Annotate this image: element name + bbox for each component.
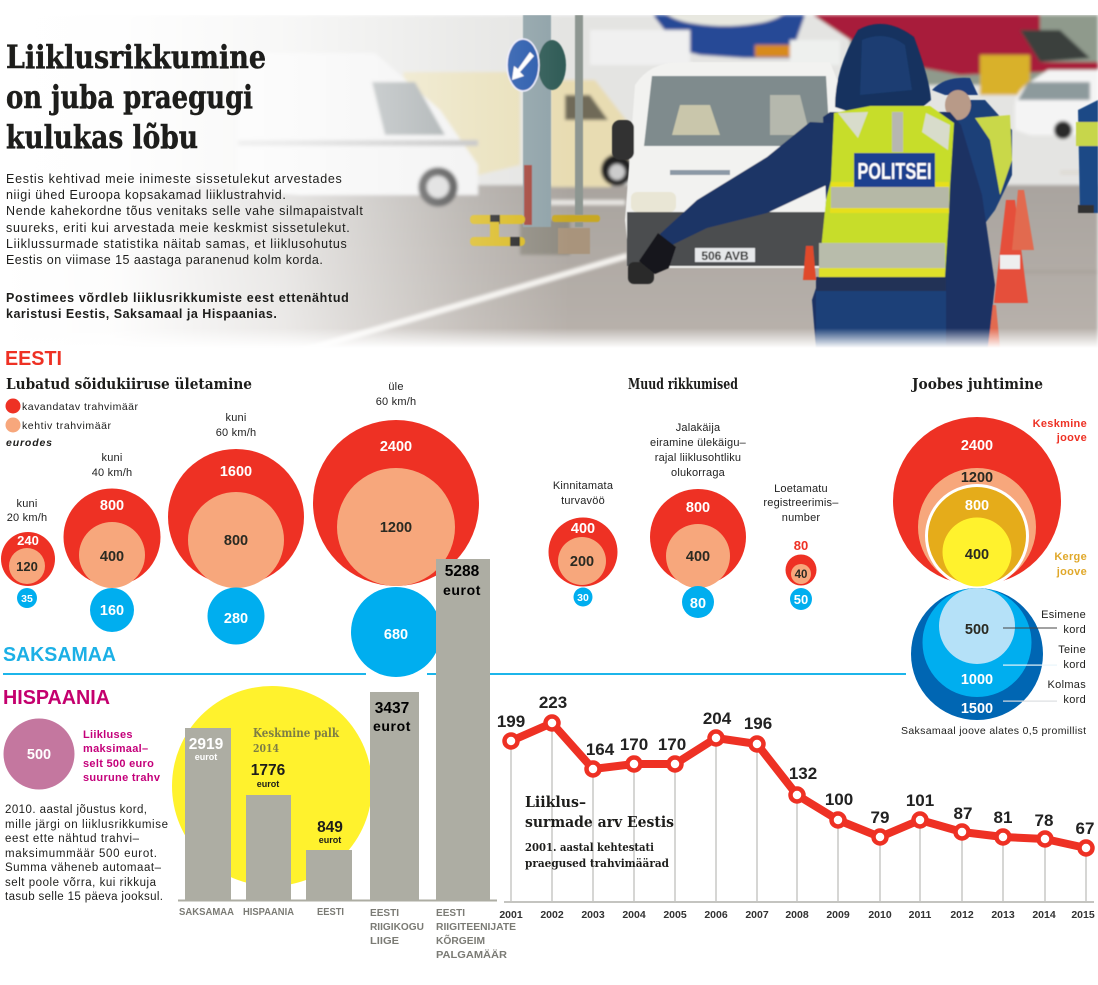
intro text: niigi ühed Euroopa kopsakamad liiklustrahvid.: [6, 188, 286, 202]
salary chart: eurot: [195, 752, 217, 762]
bubble group: pedestrian: rajal liiklusohtliku: [655, 452, 741, 464]
Hispaania callout: suurune trahv: [83, 772, 161, 784]
cones: [994, 200, 1028, 303]
bubble group: up to 20 km/h: 120: [16, 559, 38, 574]
bubble group: drunk driving Germany: Esimene: [1041, 609, 1086, 621]
bubble group: drunk driving Germany: 500: [965, 622, 989, 638]
title: on juba praegugi: [6, 78, 253, 116]
line chart: traffic deaths: 223: [539, 693, 567, 712]
salary chart: EESTI: [317, 906, 344, 918]
salary chart: 5288: [445, 563, 480, 580]
line chart: traffic deaths: 2010: [868, 909, 892, 921]
heading: other violations: Muud rikkumised: [628, 375, 738, 393]
bubble group: unreadable plate: registreerimis–: [763, 497, 839, 509]
line chart: traffic deaths: [497, 693, 1095, 921]
salary chart: eurot: [319, 835, 341, 845]
intro text: [6, 172, 363, 267]
salary chart: eurot: [257, 779, 279, 789]
Saksamaa heading: SAKSAMAA: [3, 644, 116, 666]
bubble group: drunk driving Estonia: 1200: [961, 470, 993, 486]
bubble group: over 60 km/h: 60 km/h: [376, 396, 416, 408]
line chart: traffic deaths: 196: [744, 714, 772, 733]
Hispaania text: [5, 804, 168, 903]
bubble group: over 60 km/h: 680: [384, 627, 408, 643]
bubble group: up to 60 km/h: [168, 412, 304, 644]
line chart title: Liiklus–: [525, 793, 586, 811]
line chart: traffic deaths: 2009: [826, 909, 850, 921]
bubble group: up to 20 km/h: 35: [21, 593, 33, 605]
bubble group: up to 40 km/h: kuni: [102, 452, 122, 464]
salary chart: 2014: [253, 741, 279, 755]
bubble group: drunk driving Germany: Saksamaal joove alates 0,5 promillist: [901, 725, 1086, 737]
photo: police officer stopping a van: [151, 15, 1098, 347]
white van: [625, 62, 845, 268]
bubble group: seat belt: 30: [577, 592, 589, 604]
line chart: traffic deaths: 170: [620, 735, 648, 754]
salary chart: 3437: [375, 700, 409, 717]
bubble group: unreadable plate: number: [782, 512, 820, 524]
line chart title: [525, 793, 674, 870]
bubble group: pedestrian: 400: [686, 549, 710, 565]
intro text bold: Postimees võrdleb liiklusrikkumiste eest ettenähtud: [6, 291, 349, 305]
line chart: traffic deaths: 2001: [499, 909, 523, 921]
salary chart: SAKSAMAA: [179, 906, 234, 918]
salary chart: LIIGE: [370, 935, 399, 947]
bubble group: up to 60 km/h: 800: [224, 533, 248, 549]
line chart: traffic deaths: 79: [871, 808, 889, 827]
intro text bold: [6, 291, 349, 321]
bubble group: pedestrian: Jalakäija: [676, 422, 721, 434]
bubble group: over 60 km/h: [313, 381, 479, 677]
bubble group: drunk driving Estonia: joove: [1056, 566, 1087, 578]
salary chart: EESTI: [370, 907, 399, 919]
Hispaania callout: selt 500 euro: [83, 758, 154, 770]
line chart: traffic deaths: 2008: [785, 909, 809, 921]
title: Liiklusrikkumine: [6, 38, 266, 76]
intro text: suureks, eriti kui arvestada meie keskmist sissetulekut.: [6, 221, 350, 235]
bubble group: drunk driving Germany: kord: [1063, 624, 1086, 636]
bubble group: pedestrian: 80: [690, 596, 706, 612]
bubble group: up to 60 km/h: 60 km/h: [216, 427, 256, 439]
line chart: traffic deaths: 87: [954, 804, 972, 823]
Hispaania callout: [83, 729, 161, 784]
bubble group: drunk driving Estonia: 800: [965, 498, 989, 514]
salary chart: 2919: [189, 736, 224, 753]
bubble group: over 60 km/h: üle: [388, 381, 404, 393]
bubble group: unreadable plate: Loetamatu: [774, 483, 828, 495]
line chart: traffic deaths: 2003: [581, 909, 605, 921]
bubble group: drunk driving Germany: Teine: [1058, 644, 1086, 656]
Hispaania fine bubble: 500: [27, 747, 51, 763]
salary chart: PALGAMÄÄR: [436, 948, 507, 961]
Hispaania text: selt poole võrra, kui rikkuja: [5, 877, 157, 889]
line chart: traffic deaths: 2004: [622, 909, 646, 921]
Hispaania text: eest ette nähtud trahvi–: [5, 833, 140, 845]
Hispaania text: maksimummäär 500 eurot.: [5, 848, 157, 860]
line chart title: praegused trahvimäärad: [525, 856, 669, 870]
line chart: traffic deaths: 81: [994, 808, 1012, 827]
Hispaania heading: HISPAANIA: [3, 687, 110, 709]
bubble group: drunk driving Estonia: joove: [1056, 432, 1087, 444]
salary chart: Keskmine palk: [253, 726, 340, 740]
salary chart: [172, 559, 516, 961]
bubble group: seat belt: Kinnitamata: [553, 480, 614, 492]
intro text: Liiklussurmade statistika näitab samas, et liiklusohutus: [6, 237, 347, 251]
salary chart: EESTI: [436, 907, 465, 919]
line chart: traffic deaths: 2007: [745, 909, 769, 921]
bubble group: pedestrian: eiramine ülekäigu–: [650, 437, 747, 449]
legend: [6, 398, 138, 449]
line chart: traffic deaths: 2013: [991, 909, 1015, 921]
bubble group: unreadable plate: 50: [794, 592, 808, 607]
intro text bold: karistusi Eestis, Saksamaal ja Hispaanias.: [6, 307, 277, 321]
bubble group: seat belt: 400: [571, 521, 595, 537]
Hispaania text: tasub selle 15 päeva jooksul.: [5, 891, 163, 903]
bubble group: drunk driving Estonia: Kerge: [1054, 551, 1087, 563]
bubble group: drunk driving Germany: kord: [1063, 694, 1086, 706]
line chart title: surmade arv Eestis: [525, 813, 674, 831]
intro text: Nende kahekordne tõus venitaks selle vahe silmapaistvalt: [6, 204, 363, 218]
line chart: traffic deaths: 170: [658, 735, 686, 754]
Hispaania callout: Liikluses: [83, 729, 133, 741]
bubble group: pedestrian: olukorraga: [671, 467, 726, 479]
officer: [812, 112, 995, 348]
bubble group: up to 20 km/h: kuni: [17, 498, 37, 510]
line chart: traffic deaths: 2006: [704, 909, 728, 921]
photo: police officer stopping a van: POLITSEI: [858, 158, 932, 184]
salary chart: eurot: [443, 582, 481, 598]
bubble group: up to 40 km/h: 400: [100, 549, 124, 565]
heading: EESTI: EESTI: [5, 348, 62, 370]
line chart: traffic deaths: 132: [789, 764, 817, 783]
line chart title: 2001. aastal kehtestati: [525, 840, 655, 854]
bubble group: drunk driving Estonia: [893, 417, 1087, 588]
bubble group: unreadable plate: 80: [794, 538, 808, 553]
bubble group: drunk driving Germany: [901, 588, 1086, 737]
bubble group: up to 60 km/h: 1600: [220, 464, 252, 480]
line chart: traffic deaths: 2011: [909, 909, 932, 921]
salary chart: KÕRGEIM: [436, 934, 485, 947]
other officers: [956, 99, 1013, 222]
bubble group: up to 20 km/h: [1, 498, 55, 608]
bubble group: seat belt: [548, 480, 618, 606]
title: kulukas lõbu: [6, 118, 198, 156]
salary chart: RIIGITEENIJATE: [436, 921, 516, 933]
bubble group: unreadable plate: [763, 483, 839, 610]
line chart: traffic deaths: 2015: [1071, 909, 1095, 921]
salary chart: HISPAANIA: [243, 906, 294, 918]
bubble group: over 60 km/h: 1200: [380, 520, 412, 536]
Hispaania text: Summa väheneb automaat–: [5, 862, 162, 874]
legend: kehtiv trahvimäär: [22, 420, 112, 432]
heading: speeding: Lubatud sõidukiiruse ületamine: [6, 375, 252, 393]
salary chart: eurot: [373, 718, 411, 734]
bubble group: up to 60 km/h: kuni: [226, 412, 246, 424]
bubble group: seat belt: turvavöö: [561, 495, 605, 507]
bubble group: up to 40 km/h: 800: [100, 498, 124, 514]
Hispaania fine bubble: [4, 718, 74, 790]
Saksamaa divider: [3, 673, 906, 675]
line chart: traffic deaths: 2005: [663, 909, 687, 921]
bubble group: drunk driving Germany: kord: [1063, 659, 1086, 671]
heading: drunk driving: Joobes juhtimine: [910, 375, 1043, 393]
bubble group: pedestrian: 800: [686, 500, 710, 516]
bubble group: up to 20 km/h: 20 km/h: [7, 512, 47, 524]
bubble group: pedestrian: [650, 422, 747, 618]
bubble group: up to 40 km/h: 40 km/h: [92, 467, 132, 479]
bubble group: up to 40 km/h: 160: [100, 603, 124, 619]
Hispaania text: mille järgi on liiklusrikkumise: [5, 819, 168, 831]
photo: police officer stopping a van: 506 AVB: [701, 249, 749, 263]
bubble group: drunk driving Germany: 1000: [961, 672, 993, 688]
line chart: traffic deaths: 100: [825, 790, 853, 809]
Hispaania callout: maksimaal–: [83, 743, 148, 755]
salary chart: RIIGIKOGU: [370, 921, 424, 933]
intro text: Eestis on viimase 15 aastaga paranenud kolm korda.: [6, 253, 323, 267]
line chart: traffic deaths: 199: [497, 712, 525, 731]
Hispaania text: 2010. aastal jõustus kord,: [5, 804, 147, 816]
salary chart: 1776: [251, 762, 286, 779]
bubble group: up to 60 km/h: 280: [224, 611, 248, 627]
bubble group: drunk driving Germany: Kolmas: [1048, 679, 1086, 691]
bubble group: over 60 km/h: 2400: [380, 439, 412, 455]
line chart: traffic deaths: 78: [1035, 811, 1053, 830]
intro text: Eestis kehtivad meie inimeste sissetulekut arvestades: [6, 172, 342, 186]
line chart: traffic deaths: 2014: [1032, 909, 1056, 921]
bubble group: drunk driving Estonia: 2400: [961, 438, 993, 454]
bubble group: seat belt: 200: [570, 554, 594, 570]
line chart: traffic deaths: 101: [906, 791, 934, 810]
bubble group: up to 20 km/h: 240: [17, 533, 39, 548]
bubble group: drunk driving Estonia: 400: [965, 547, 989, 563]
legend: eurodes: [6, 437, 52, 449]
bubble group: unreadable plate: 40: [795, 569, 807, 581]
line chart: traffic deaths: 2012: [950, 909, 974, 921]
bubble group: drunk driving Germany: 1500: [961, 701, 993, 717]
line chart: traffic deaths: 67: [1076, 819, 1094, 838]
title: [6, 38, 266, 156]
bubble group: up to 40 km/h: [64, 452, 160, 632]
salary chart: 849: [317, 819, 343, 836]
line chart: traffic deaths: 164: [586, 740, 615, 759]
legend: kavandatav trahvimäär: [22, 401, 138, 413]
pole and sign: [523, 15, 551, 227]
line chart: traffic deaths: 204: [703, 709, 732, 728]
line chart: traffic deaths: 2002: [540, 909, 564, 921]
bubble group: drunk driving Estonia: Keskmine: [1033, 418, 1087, 430]
